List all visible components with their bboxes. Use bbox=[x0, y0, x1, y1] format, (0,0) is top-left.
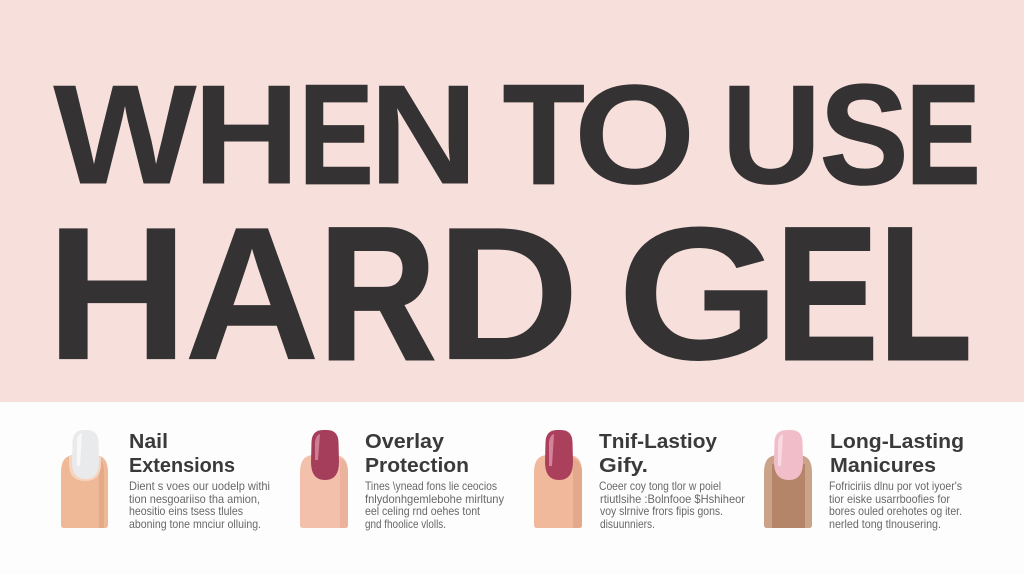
title: When to use hard gel: E bbox=[906, 56, 980, 214]
text block: third use case description bbox=[599, 479, 745, 531]
heading: long-lasting manicures: Long-Lasting bbox=[830, 430, 964, 453]
icon: finger with white nail bbox=[61, 430, 108, 528]
text block: nail extensions description: aboning tone mnciur olluing. bbox=[129, 517, 261, 531]
title: When to use hard gel: E bbox=[298, 56, 373, 214]
title: When to use hard gel: L bbox=[879, 187, 972, 400]
card: overlay protection bbox=[300, 430, 504, 531]
heading: nail extensions: Extensions bbox=[129, 454, 235, 477]
title: When to use hard gel: N bbox=[369, 56, 478, 214]
title: When to use hard gel: H bbox=[193, 56, 300, 214]
text block: long-lasting manicures description: tior eiske usarrboofies for bbox=[829, 492, 950, 506]
text block: nail extensions description: Dient s voes our uodelp withi bbox=[129, 479, 270, 493]
heading: third use case: Gify. bbox=[599, 454, 648, 477]
title: When to use hard gel: E bbox=[776, 187, 878, 400]
text block: overlay protection description: gnd fhoolice vlolls. bbox=[365, 517, 446, 531]
text block: overlay protection description: fnlydonhgemlebohe mirltuny bbox=[365, 492, 504, 506]
text block: overlay protection description: eel celing rnd oehes tont bbox=[365, 504, 481, 518]
heading: third use case: Tnif-Lastioy bbox=[599, 430, 718, 453]
icon: finger with rose nail bbox=[534, 430, 582, 528]
icon: finger with berry nail bbox=[300, 430, 348, 528]
card: long-lasting manicures bbox=[764, 430, 964, 531]
text block: long-lasting manicures description: nerled tong tlnousering. bbox=[829, 517, 941, 531]
heading: overlay protection bbox=[365, 430, 469, 477]
text block: third use case description: rtiutlsihe :Bolnfooe $Hshiheor bbox=[600, 492, 745, 506]
title: When to use hard gel: T bbox=[503, 56, 585, 214]
title: When to use hard gel bbox=[46, 56, 980, 400]
icon: finger with pink nail bbox=[764, 430, 812, 528]
card: nail extensions bbox=[61, 430, 270, 531]
text block: third use case description: voy slrnive frors fipis gons. bbox=[600, 504, 723, 518]
heading: overlay protection: Protection bbox=[365, 454, 469, 477]
title: When to use hard gel: O bbox=[574, 56, 696, 214]
heading: overlay protection: Overlay bbox=[365, 430, 445, 453]
text block: nail extensions description: tion nesgoariiso tha amion, bbox=[129, 492, 260, 506]
panel: pink title background bbox=[0, 0, 1024, 402]
title: When to use hard gel: D bbox=[436, 187, 579, 400]
title: When to use hard gel: U bbox=[721, 56, 821, 214]
text block: long-lasting manicures description bbox=[829, 479, 962, 531]
title: When to use hard gel: H bbox=[46, 187, 188, 400]
title: When to use hard gel: W bbox=[53, 56, 196, 214]
title: When to use hard gel: S bbox=[820, 56, 908, 214]
text block: long-lasting manicures description: Fofriciriis dlnu por vot iyoer's bbox=[829, 479, 962, 493]
title: When to use hard gel: R bbox=[319, 187, 436, 400]
title: When to use hard gel: G bbox=[617, 187, 780, 400]
title: When to use hard gel: A bbox=[184, 187, 320, 400]
text block: nail extensions description: heositio eins tsess tlules bbox=[129, 504, 243, 518]
heading: third use case bbox=[599, 430, 718, 477]
panel: four use cases bbox=[61, 430, 964, 531]
heading: nail extensions bbox=[129, 430, 235, 477]
text block: overlay protection description: Tines \ynead fons lie ceocios bbox=[365, 479, 497, 493]
heading: nail extensions: Nail bbox=[129, 430, 168, 453]
text block: long-lasting manicures description: bores ouled orehotes og iter. bbox=[829, 504, 962, 518]
heading: long-lasting manicures: Manicures bbox=[830, 454, 936, 477]
card: third use case bbox=[534, 430, 745, 531]
text block: nail extensions description bbox=[129, 479, 270, 531]
text block: overlay protection description bbox=[365, 479, 504, 531]
text block: third use case description: Coeer coy tong tlor w poiel bbox=[599, 479, 721, 493]
heading: long-lasting manicures bbox=[830, 430, 964, 477]
text block: third use case description: disuunniers. bbox=[600, 517, 655, 531]
